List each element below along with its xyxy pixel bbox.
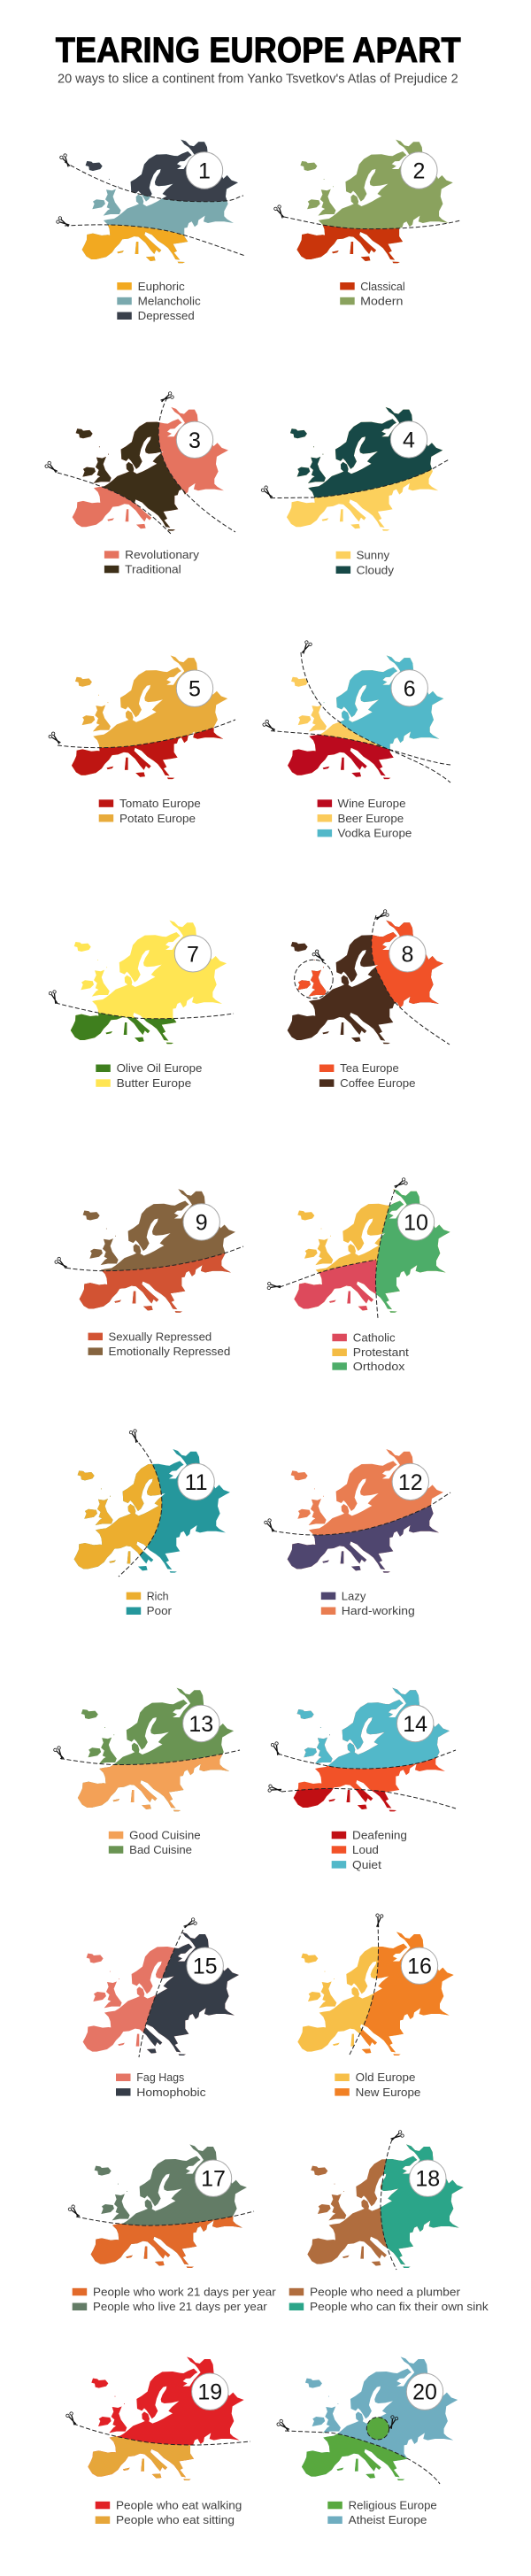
legend 9: Sexually Repressed bbox=[108, 1330, 212, 1343]
legend 14: Quiet bbox=[352, 1858, 381, 1871]
number badge 4 bbox=[390, 421, 427, 458]
legend 1 bbox=[117, 280, 201, 322]
number badge 17 bbox=[195, 2160, 232, 2196]
scissors 10 bbox=[267, 1177, 408, 1291]
legend 6 bbox=[318, 797, 412, 840]
legend 18: People who can fix their own sink bbox=[310, 2300, 489, 2313]
number badge 15: 15 bbox=[193, 1955, 218, 1979]
legend 4: Cloudy bbox=[357, 563, 395, 576]
legend 7 bbox=[96, 1061, 202, 1090]
legend 2: Classical bbox=[360, 280, 405, 293]
number badge 19 bbox=[192, 2373, 228, 2410]
cut line 13 bbox=[60, 1750, 240, 1765]
map 9 bbox=[80, 1189, 235, 1313]
legend 12 bbox=[321, 1589, 415, 1617]
legend 14: Loud bbox=[352, 1843, 379, 1856]
legend 16: New Europe bbox=[356, 2086, 420, 2099]
map 17 bbox=[91, 2144, 247, 2268]
scissors 18 bbox=[389, 2130, 404, 2143]
map 14 bbox=[294, 1688, 450, 1811]
scissors 12 bbox=[264, 1518, 277, 1533]
cut line 2 bbox=[284, 217, 460, 229]
panel: map 15 fag hags homophobic bbox=[83, 1917, 239, 2099]
scissors 9 bbox=[54, 1257, 69, 1270]
legend 6: Beer Europe bbox=[338, 812, 404, 825]
panel: map 4 sunny cloudy bbox=[261, 407, 450, 576]
number badge 13 bbox=[183, 1705, 219, 1742]
legend 1: Euphoric bbox=[138, 280, 185, 293]
map 7 bbox=[71, 921, 227, 1044]
number badge 20: 20 bbox=[412, 2380, 437, 2405]
panel: map 17 work live 21 days bbox=[68, 2144, 276, 2313]
legend 9: Emotionally Repressed bbox=[108, 1345, 230, 1358]
scissors 6 bbox=[262, 640, 312, 733]
map 15 bbox=[83, 1932, 239, 2055]
number badge 6 bbox=[391, 670, 427, 706]
legend 13 bbox=[109, 1829, 201, 1856]
legend 5: Tomato Europe bbox=[119, 797, 201, 810]
legend 5 bbox=[99, 797, 201, 825]
panel: map 12 lazy hard-working bbox=[264, 1449, 450, 1617]
cut line 12 bbox=[273, 1492, 450, 1535]
legend 12: Hard-working bbox=[342, 1604, 415, 1617]
legend 13: Bad Cuisine bbox=[129, 1843, 192, 1856]
map 18 bbox=[307, 2144, 464, 2268]
scissors 19 bbox=[65, 2411, 79, 2426]
number badge 7: 7 bbox=[187, 942, 199, 967]
number badge 20 bbox=[406, 2373, 443, 2410]
legend 15: Homophobic bbox=[136, 2086, 206, 2099]
legend 20: Religious Europe bbox=[349, 2498, 437, 2512]
map 19 bbox=[88, 2356, 244, 2480]
legend 10 bbox=[332, 1330, 409, 1373]
map 16 bbox=[297, 1932, 454, 2055]
number badge 17: 17 bbox=[201, 2167, 226, 2192]
cut lines 6 bbox=[271, 652, 450, 783]
cut line 7 bbox=[56, 1003, 234, 1019]
legend 10: Catholic bbox=[353, 1330, 396, 1344]
legend 18: People who need a plumber bbox=[310, 2286, 461, 2298]
legend 18 bbox=[289, 2286, 489, 2313]
legend 6: Wine Europe bbox=[338, 797, 405, 810]
cut line 17 bbox=[76, 2211, 254, 2225]
number badge 9: 9 bbox=[196, 1210, 208, 1235]
cut lines 1 bbox=[65, 162, 245, 256]
number badge 1 bbox=[186, 152, 223, 189]
map 6 bbox=[288, 655, 443, 779]
panel: map 10 catholic protestant orthodox bbox=[267, 1177, 450, 1373]
cut lines 3 bbox=[58, 397, 235, 534]
scissors 3 bbox=[44, 391, 174, 474]
scissors 2 bbox=[273, 204, 287, 220]
number badge 11: 11 bbox=[185, 1470, 208, 1495]
legend 3: Traditional bbox=[125, 563, 181, 575]
legend 7: Butter Europe bbox=[117, 1076, 191, 1090]
number badge 13: 13 bbox=[189, 1712, 213, 1737]
legend 1: Melancholic bbox=[138, 294, 201, 308]
cut lines 20 bbox=[285, 2418, 440, 2484]
title: TEARING EUROPE APART bbox=[56, 31, 461, 70]
legend 17: People who live 21 days per year bbox=[93, 2300, 267, 2313]
map 13 bbox=[78, 1688, 234, 1811]
map 4 bbox=[287, 407, 442, 531]
legend 10: Protestant bbox=[353, 1346, 409, 1359]
cut line 19 bbox=[73, 2424, 250, 2445]
legend 8: Coffee Europe bbox=[340, 1076, 416, 1090]
number badge 16 bbox=[401, 1947, 438, 1984]
number badge 11 bbox=[178, 1463, 214, 1500]
legend 17: People who work 21 days per year bbox=[93, 2286, 276, 2298]
legend 16 bbox=[335, 2071, 420, 2099]
number badge 10 bbox=[397, 1204, 435, 1240]
map 2 bbox=[296, 140, 453, 263]
number badge 10: 10 bbox=[404, 1210, 428, 1235]
legend 4 bbox=[336, 549, 395, 576]
number badge 9 bbox=[183, 1204, 219, 1240]
panel: map 13 good bad cuisine bbox=[53, 1688, 240, 1856]
scissors 20 bbox=[276, 2415, 398, 2433]
number badge 14 bbox=[396, 1705, 434, 1742]
number badge 5: 5 bbox=[189, 677, 201, 702]
cut line 5 bbox=[58, 720, 235, 748]
number badge 18: 18 bbox=[415, 2167, 440, 2192]
cut line 11 bbox=[119, 1438, 162, 1577]
panel: map 8 tea coffee bbox=[288, 909, 450, 1090]
legend 2 bbox=[340, 280, 405, 308]
legend 8 bbox=[319, 1061, 416, 1090]
number badge 19: 19 bbox=[197, 2380, 222, 2405]
scissors 13 bbox=[53, 1746, 66, 1761]
number badge 5 bbox=[176, 670, 213, 706]
number badge 2: 2 bbox=[412, 159, 425, 184]
number badge 3: 3 bbox=[189, 428, 201, 453]
subtitle: 20 ways to slice a continent from Yanko Tsvetkov's Atlas of Prejudice 2 bbox=[58, 71, 458, 86]
panel: map 11 rich poor bbox=[74, 1429, 230, 1617]
cut lines 10 bbox=[280, 1190, 395, 1318]
legend 1: Depressed bbox=[138, 309, 195, 322]
legend 20: Atheist Europe bbox=[349, 2513, 427, 2526]
legend 4: Sunny bbox=[357, 549, 390, 561]
legend 12: Lazy bbox=[342, 1589, 366, 1602]
scissors 17 bbox=[68, 2204, 81, 2219]
map 20 bbox=[302, 2356, 458, 2480]
scissors 14 bbox=[268, 1741, 282, 1793]
legend 7: Olive Oil Europe bbox=[117, 1061, 202, 1075]
map 12 bbox=[288, 1449, 443, 1573]
number badge 4: 4 bbox=[403, 428, 415, 452]
panel: map 14 deafening loud quiet bbox=[268, 1688, 456, 1871]
panel: map 7 olive oil butter bbox=[49, 921, 234, 1090]
number badge 15 bbox=[187, 1947, 223, 1984]
legend 10: Orthodox bbox=[353, 1360, 405, 1373]
panel: map 2 classical modern bbox=[273, 140, 460, 308]
number badge 8 bbox=[389, 936, 426, 972]
legend 11: Poor bbox=[147, 1604, 173, 1617]
map 11 bbox=[74, 1449, 230, 1573]
panel: map 18 plumber sink bbox=[289, 2130, 489, 2313]
cut line 18 bbox=[381, 2140, 396, 2270]
number badge 18 bbox=[410, 2160, 446, 2196]
map 1 bbox=[82, 140, 238, 263]
legend 13: Good Cuisine bbox=[129, 1829, 201, 1841]
panel: map 5 tomato potato bbox=[48, 655, 235, 825]
panel: map 20 religious atheist bbox=[276, 2356, 458, 2526]
number badge 1: 1 bbox=[198, 159, 211, 184]
legend 9 bbox=[88, 1330, 230, 1358]
panel: map 3 revolutionary traditional bbox=[44, 391, 235, 575]
cut line 15 bbox=[139, 1930, 183, 2057]
number badge 8: 8 bbox=[401, 942, 413, 967]
panel: map 6 wine beer vodka bbox=[262, 640, 450, 840]
legend 5: Potato Europe bbox=[119, 812, 196, 825]
cut lines 14 bbox=[278, 1750, 456, 1809]
scissors 8 bbox=[312, 909, 389, 964]
scissors 4 bbox=[261, 485, 274, 500]
scissors 15 bbox=[182, 1917, 197, 1931]
legend 15 bbox=[116, 2071, 206, 2099]
legend 6: Vodka Europe bbox=[338, 827, 412, 840]
panel: map 19 eat walking sitting bbox=[65, 2356, 250, 2526]
number badge 6: 6 bbox=[404, 676, 416, 701]
cut line 9 bbox=[66, 1246, 243, 1271]
scissors 16 bbox=[374, 1914, 383, 1928]
map 8 bbox=[288, 921, 443, 1044]
number badge 2 bbox=[401, 152, 437, 189]
panel: map 16 old new europe bbox=[297, 1914, 454, 2099]
legend 19 bbox=[96, 2498, 242, 2526]
cut lines 8 bbox=[295, 915, 450, 1045]
legend 3: Revolutionary bbox=[125, 548, 200, 561]
number badge 12 bbox=[392, 1463, 428, 1500]
panel: map 1 euphoric melancholic depressed bbox=[56, 140, 245, 322]
number badge 14: 14 bbox=[403, 1712, 427, 1737]
legend 14 bbox=[332, 1829, 407, 1871]
legend 20 bbox=[327, 2498, 437, 2526]
legend 15: Fag Hags bbox=[136, 2071, 185, 2084]
number badge 16: 16 bbox=[407, 1955, 432, 1979]
number badge 12: 12 bbox=[398, 1470, 423, 1495]
scissors 5 bbox=[48, 731, 63, 746]
cut line 16 bbox=[349, 1923, 378, 2056]
legend 3 bbox=[104, 548, 200, 575]
cut line 4 bbox=[271, 459, 450, 498]
number badge 7 bbox=[174, 936, 212, 972]
legend 16: Old Europe bbox=[356, 2071, 415, 2084]
legend 2: Modern bbox=[360, 294, 403, 308]
scissors 11 bbox=[129, 1429, 141, 1444]
panel: map 9 sexually emotionally repressed bbox=[54, 1189, 243, 1358]
map 3 bbox=[73, 407, 228, 531]
map 10 bbox=[294, 1189, 450, 1313]
legend 8: Tea Europe bbox=[340, 1061, 399, 1075]
map 5 bbox=[72, 655, 227, 779]
legend 11 bbox=[127, 1589, 173, 1617]
scissors 7 bbox=[49, 990, 60, 1005]
scissors 1 bbox=[56, 153, 73, 229]
legend 19: People who eat sitting bbox=[116, 2513, 235, 2526]
legend 19: People who eat walking bbox=[116, 2498, 242, 2512]
legend 14: Deafening bbox=[352, 1829, 407, 1841]
legend 11: Rich bbox=[147, 1589, 169, 1602]
number badge 3 bbox=[176, 421, 213, 459]
legend 17 bbox=[73, 2286, 276, 2313]
